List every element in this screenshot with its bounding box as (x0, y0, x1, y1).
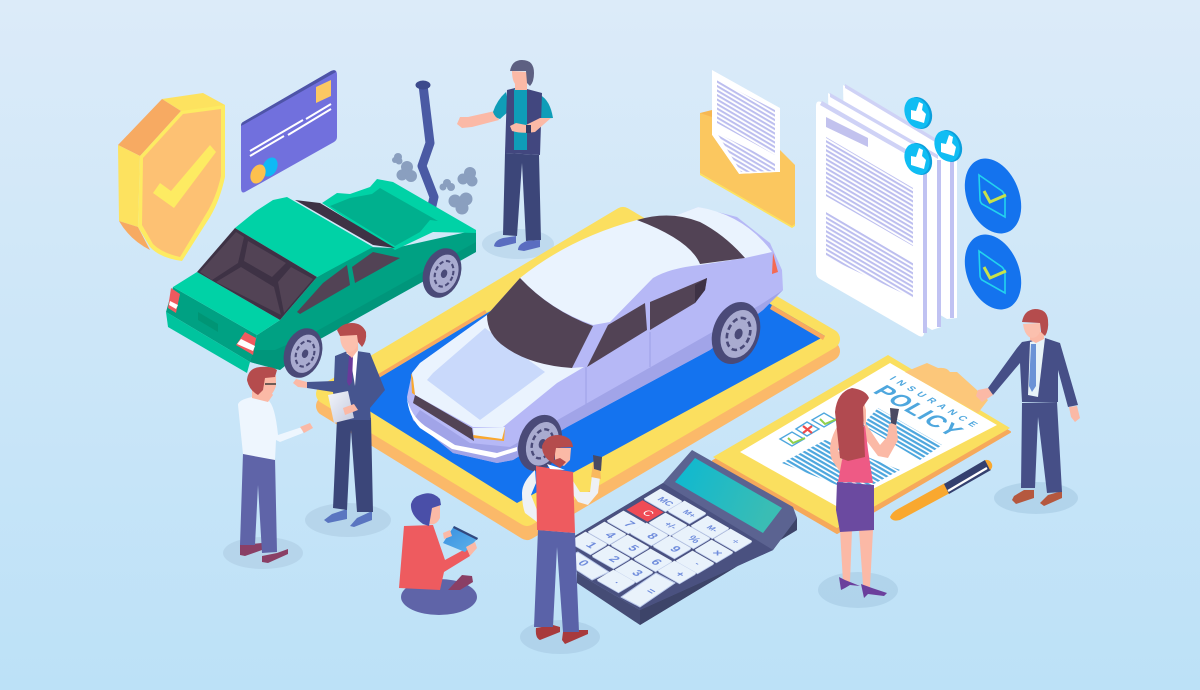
keys: 6 (647, 557, 666, 567)
icon: thumbs-up badges (900, 93, 967, 179)
back sheet (843, 85, 957, 319)
keys: 4 (601, 530, 620, 540)
keys: 2 (605, 554, 624, 564)
keys: + (672, 570, 688, 579)
keys: 3 (628, 568, 647, 578)
tail light (772, 253, 778, 274)
body (407, 207, 783, 463)
keys: 7 (620, 519, 639, 529)
headlight (473, 427, 505, 440)
side windows (297, 252, 400, 314)
person: woman with phone (818, 388, 899, 608)
icon: blue check badge top (954, 150, 1032, 242)
keys: . (612, 578, 624, 585)
person: man in navy suit shaking hands (976, 309, 1080, 514)
keys: 8 (643, 531, 662, 541)
policy title: POLICY (868, 382, 970, 440)
grille (413, 395, 474, 441)
wheels (277, 323, 329, 383)
person: sitting with tablet (399, 493, 478, 615)
person: man in suit with folder (293, 323, 391, 537)
rear deck (173, 272, 280, 335)
insurance policy clipboard (713, 355, 1010, 533)
keys: M- (704, 524, 720, 533)
side windows (587, 278, 707, 367)
wheels (510, 409, 570, 477)
keys: 0 (574, 558, 593, 568)
keys: % (684, 534, 703, 545)
phone platform (326, 217, 830, 530)
icon: pen (890, 460, 992, 521)
keys: 5 (624, 543, 643, 553)
hood crumpled (322, 179, 476, 250)
windshield (487, 278, 593, 368)
calculator (561, 450, 797, 625)
person: bearded man with phone (520, 435, 602, 654)
roof (520, 207, 772, 325)
keys (561, 489, 752, 607)
person: man with vest and teal shirt (457, 60, 554, 259)
icon: credit card (241, 70, 337, 192)
person: man in white shirt (223, 367, 313, 569)
rear window (637, 215, 745, 264)
front sheet (816, 102, 924, 337)
windshield (295, 200, 395, 248)
keys: C (639, 509, 656, 518)
screen (675, 458, 782, 533)
keys: +/- (662, 520, 680, 531)
roof (235, 197, 373, 277)
icon: blue check badge bottom (954, 226, 1032, 318)
keys: MC (655, 496, 676, 508)
paper sheet (740, 363, 997, 507)
policy title: INSURANCE (886, 375, 984, 431)
bumper strip (407, 397, 517, 458)
rear window (197, 228, 317, 320)
hood (412, 315, 584, 427)
checklist (780, 413, 837, 446)
icon: shield with check (118, 93, 225, 261)
keys: 9 (666, 544, 685, 554)
policy documents stack (816, 84, 957, 337)
folder (328, 391, 354, 423)
envelope with letter (700, 70, 795, 228)
side body (250, 230, 476, 370)
smoke puffs (392, 153, 478, 214)
keys: - (692, 560, 703, 567)
keys: M+ (680, 509, 698, 519)
text lines (782, 440, 900, 493)
clip (905, 363, 988, 413)
silver car on phone screen (407, 207, 783, 477)
keys: 1 (582, 540, 601, 550)
green wrecked car (166, 179, 476, 383)
rear face (166, 287, 257, 362)
keys: × (708, 548, 727, 558)
middle sheet (828, 93, 941, 330)
keys: = (643, 587, 659, 596)
broken road pole (416, 80, 434, 210)
keys: ÷ (729, 538, 742, 545)
